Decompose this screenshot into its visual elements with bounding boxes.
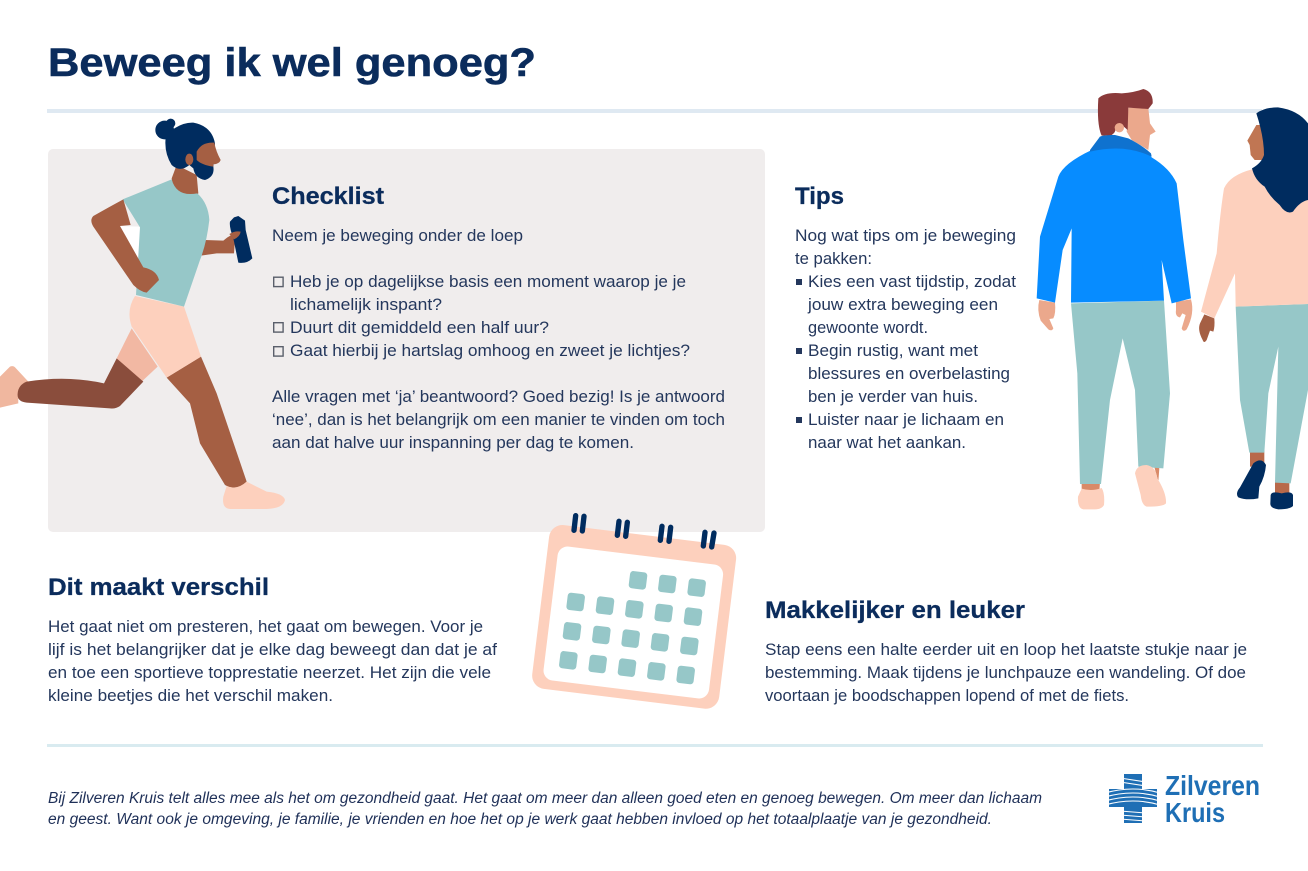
logo wordmark: Kruis bbox=[1165, 797, 1225, 828]
tips list: Luister naar je lichaam en bbox=[808, 411, 1004, 429]
illustration: walking couple bbox=[1037, 89, 1308, 509]
body text bbox=[765, 641, 1247, 705]
icon: striped cross bbox=[1105, 774, 1160, 823]
logo wordmark: Zilveren bbox=[1165, 770, 1260, 801]
panel: tips bbox=[795, 183, 1016, 452]
footer statement: Bij Zilveren Kruis telt alles mee als het om gezondheid gaat. Het gaat om meer dan alleen goed eten en genoeg bewegen. Om meer dan lichaam bbox=[48, 790, 1042, 807]
logo wordmark bbox=[1165, 770, 1260, 828]
tips list: gewoonte wordt. bbox=[808, 319, 928, 337]
body text: Stap eens een halte eerder uit en loop het laatste stukje naar je bbox=[765, 641, 1247, 659]
checklist items: Heb je op dagelijkse basis een moment waarop je je bbox=[290, 273, 686, 291]
tips list: ben je verder van huis. bbox=[808, 388, 978, 406]
tips list: Kies een vast tijdstip, zodat bbox=[808, 273, 1016, 291]
footer statement: en geest. Want ook je omgeving, je familie, je vrienden en hoe het op je werk gaat hebben invloed op het totaalplaatje van je gezondheid. bbox=[48, 811, 992, 828]
figure: man bbox=[1037, 89, 1192, 509]
heading: Dit maakt verschil bbox=[48, 574, 269, 601]
body text: kleine beetjes die het verschil maken. bbox=[48, 687, 333, 705]
body text: lijf is het belangrijker dat je elke dag beweegt dan dat je af bbox=[48, 641, 497, 659]
text: intro: Neem je beweging onder de loep bbox=[272, 227, 523, 245]
heading: Makkelijker en leuker bbox=[765, 597, 1025, 624]
tips list: naar wat het aankan. bbox=[808, 434, 966, 452]
calendar day grid bbox=[559, 571, 706, 685]
body text bbox=[48, 618, 497, 705]
tips list bbox=[796, 273, 1016, 452]
checklist items bbox=[274, 273, 690, 360]
text: conclusion bbox=[272, 388, 725, 452]
body text: voortaan je boodschappen lopend of met de fiets. bbox=[765, 687, 1129, 705]
text: conclusion: ‘nee’, dan is het belangrijk om een manier te vinden om toch bbox=[272, 411, 725, 429]
text: conclusion: aan dat halve uur inspanning per dag te komen. bbox=[272, 434, 634, 452]
runner: upper body and head bbox=[172, 165, 252, 263]
section: dit maakt verschil bbox=[48, 574, 497, 705]
title: Beweeg ik wel genoeg? bbox=[48, 41, 536, 85]
figure: woman bbox=[1199, 107, 1308, 509]
illustration: runner bbox=[0, 119, 285, 509]
text: conclusion: Alle vragen met ‘ja’ beantwoord? Goed bezig! Is je antwoord bbox=[272, 388, 725, 406]
tips list: blessures en overbelasting bbox=[808, 365, 1010, 383]
logo: Zilveren Kruis bbox=[1105, 770, 1260, 828]
footer statement bbox=[48, 790, 1042, 828]
illustration: calendar bbox=[531, 516, 738, 710]
heading: checklist: Checklist bbox=[272, 183, 384, 210]
section: makkelijker en leuker bbox=[765, 597, 1247, 705]
panel: checklist text bbox=[272, 183, 725, 452]
heading: tips: Tips bbox=[795, 183, 844, 210]
text: tips intro: Nog wat tips om je beweging bbox=[795, 227, 1016, 245]
body text: bestemming. Maak tijdens je lunchpauze een wandeling. Of doe bbox=[765, 664, 1246, 682]
tips list: jouw extra beweging een bbox=[807, 296, 998, 314]
text: tips intro bbox=[795, 227, 1016, 268]
body text: en toe een sportieve topprestatie neerzet. Het zijn die vele bbox=[48, 664, 491, 682]
checklist items: Gaat hierbij je hartslag omhoog en zweet je lichtjes? bbox=[290, 342, 690, 360]
body text: Het gaat niet om presteren, het gaat om bewegen. Voor je bbox=[48, 618, 483, 636]
tips list: Begin rustig, want met bbox=[808, 342, 978, 360]
checklist items: lichamelijk inspant? bbox=[290, 296, 442, 314]
checklist items: Duurt dit gemiddeld een half uur? bbox=[290, 319, 549, 337]
panel: checklist background bbox=[48, 149, 765, 532]
text: tips intro: te pakken: bbox=[795, 250, 872, 268]
